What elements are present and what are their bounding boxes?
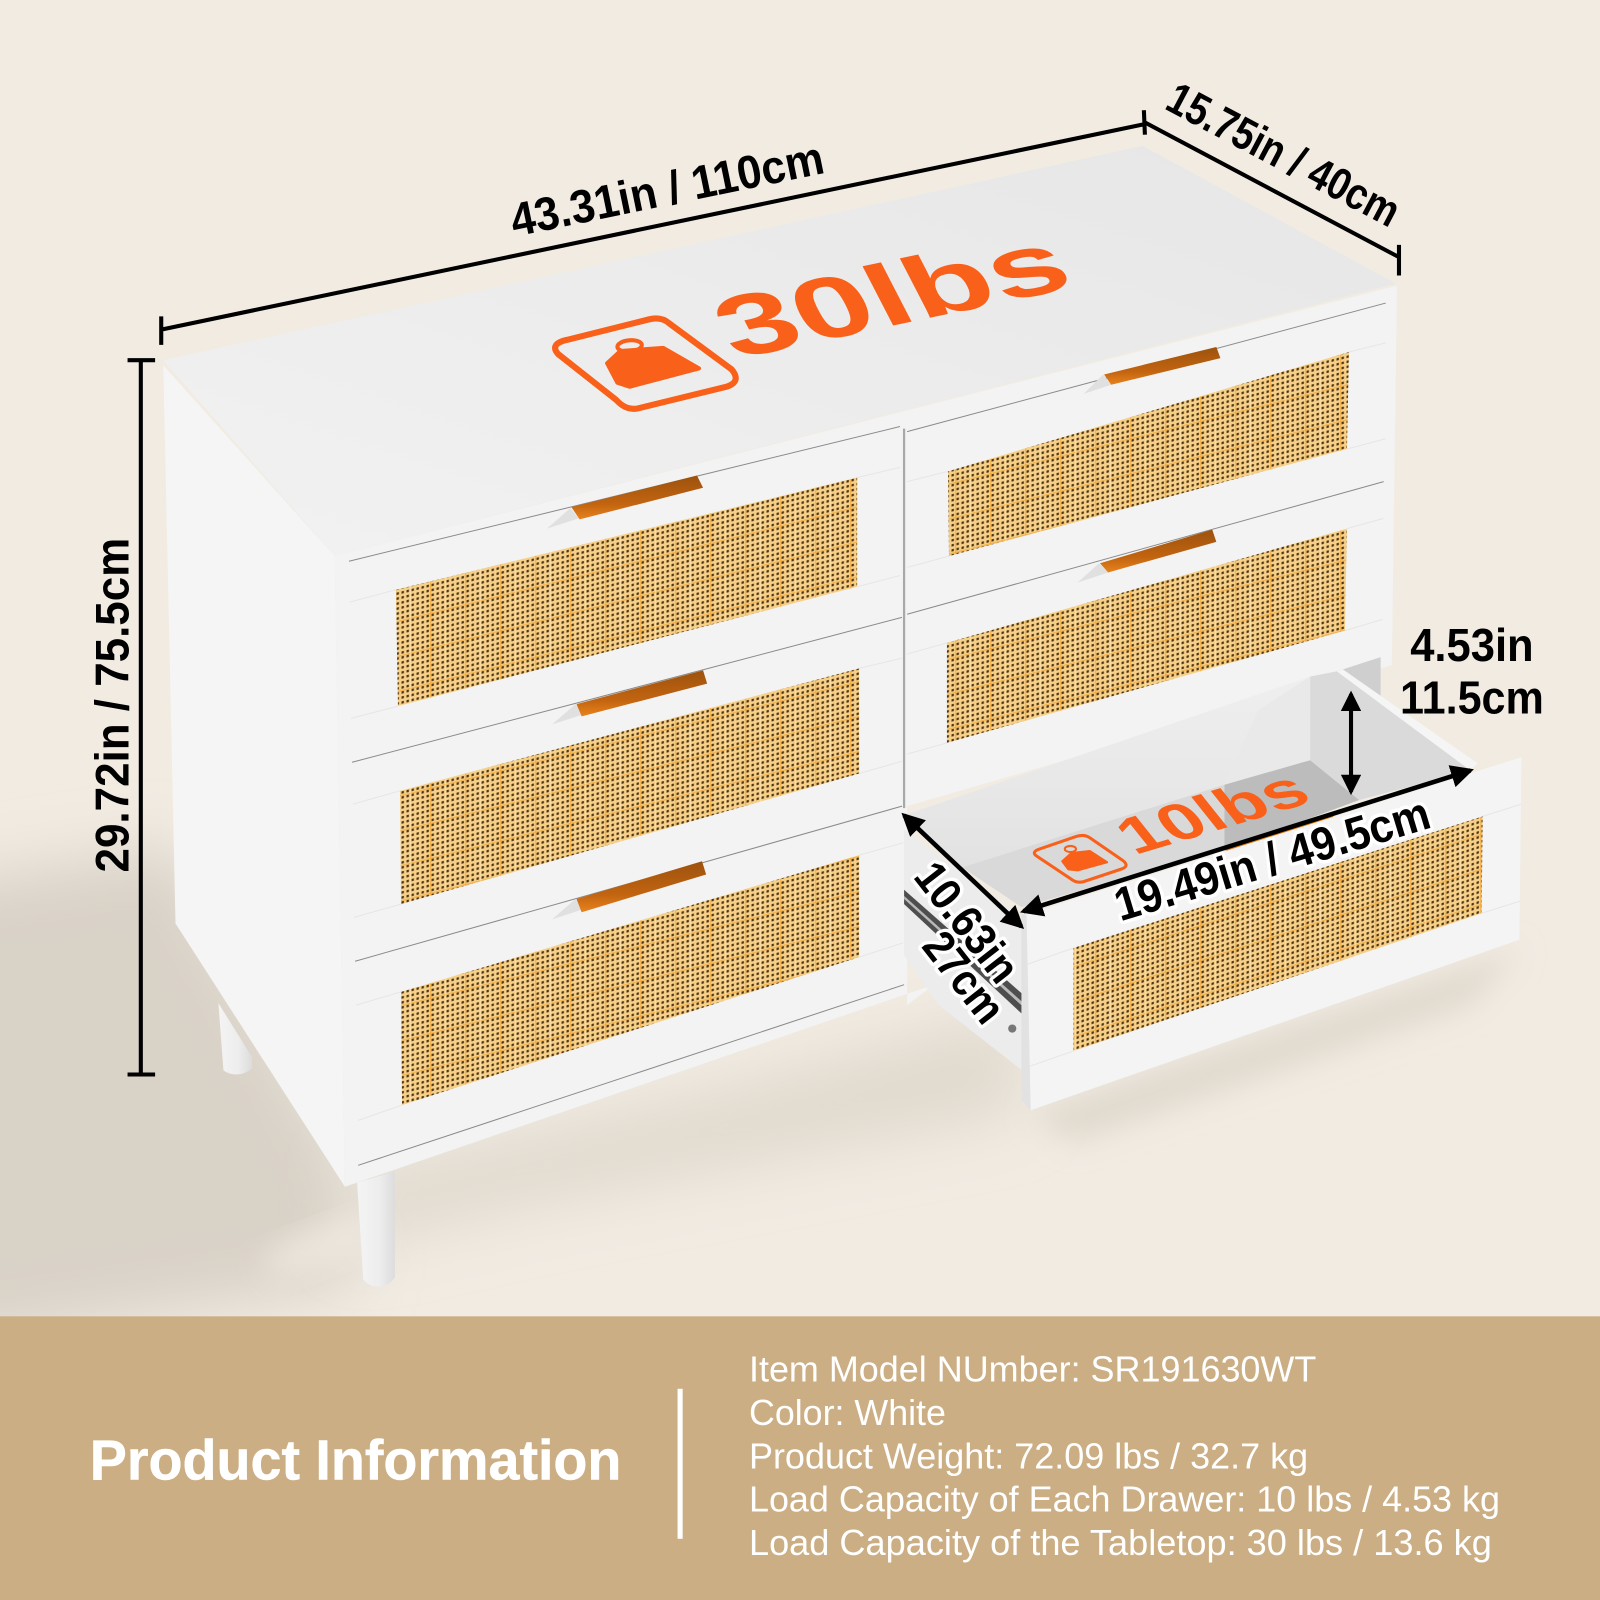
dimension: drawer inner depth bbox=[904, 815, 1030, 1033]
drawer side with rail bbox=[904, 830, 1023, 1071]
specification list: Product Weight: 72.09 lbs / 32.7 kg bbox=[749, 1436, 1308, 1476]
right inner wall bbox=[1310, 671, 1470, 800]
shaded drawer floor bbox=[1224, 760, 1359, 850]
specification list: Item Model NUmber: SR191630WT bbox=[749, 1350, 1316, 1390]
specification list bbox=[749, 1350, 1500, 1563]
back leg bbox=[218, 1003, 252, 1074]
dimension: height: 29.72in / 75.5cm bbox=[87, 538, 139, 872]
dimension: drawer inner height: 4.53in bbox=[1410, 619, 1534, 671]
cabinet front bbox=[335, 286, 1397, 1187]
tabletop bbox=[163, 146, 1396, 556]
panel: product information bbox=[0, 1316, 1600, 1600]
dimension: height bbox=[87, 360, 155, 1074]
drawer back wall bbox=[904, 677, 1310, 867]
dimension: drawer inner height: 11.5cm bbox=[1400, 671, 1544, 723]
open drawer bbox=[904, 657, 1521, 1110]
weight icon: tabletop bbox=[555, 318, 736, 409]
specification list: Color: White bbox=[749, 1393, 946, 1433]
left drawer 3 bbox=[355, 806, 904, 1165]
dimension: drawer inner width: 19.49in / 49.5cm bbox=[1108, 787, 1436, 931]
handle reflection bbox=[1224, 813, 1348, 863]
drawer load label: 10lbs bbox=[1102, 760, 1323, 865]
dimension: depth: 15.75in / 40cm bbox=[1159, 72, 1409, 237]
weight icon: drawer bbox=[1034, 835, 1126, 882]
dimension: drawer inner height bbox=[1351, 619, 1544, 792]
cavity behind drawer bbox=[1337, 657, 1381, 704]
drawer front rattan bbox=[1073, 816, 1483, 1051]
cabinet side bbox=[163, 365, 345, 1187]
heading: Product Information bbox=[90, 1429, 621, 1492]
panel: dresser illustration bbox=[163, 146, 1521, 1287]
tabletop load label: 30lbs bbox=[696, 212, 1087, 377]
floor shadows bbox=[0, 847, 1520, 1347]
drawer front bbox=[1027, 757, 1521, 1110]
front leg bbox=[357, 1171, 395, 1287]
dimension: width: 43.31in / 110cm bbox=[506, 132, 828, 247]
back wall shadow wedge bbox=[1224, 677, 1310, 785]
right drawer 2 bbox=[907, 482, 1384, 788]
centre gap between drawer columns bbox=[903, 429, 905, 808]
dimension: drawer inner depth: 27cm bbox=[913, 921, 1016, 1033]
left drawer 1 bbox=[349, 427, 900, 760]
dimension: drawer inner depth: 10.63in bbox=[905, 852, 1030, 992]
lit drawer floor bbox=[962, 785, 1224, 907]
dimension: width bbox=[161, 110, 1145, 345]
specification list: Load Capacity of the Tabletop: 30 lbs / 13.6 kg bbox=[749, 1523, 1492, 1563]
right drawer 1 bbox=[907, 303, 1386, 612]
left drawer 2 bbox=[352, 617, 902, 959]
specification list: Load Capacity of Each Drawer: 10 lbs / 4.53 kg bbox=[749, 1480, 1500, 1520]
